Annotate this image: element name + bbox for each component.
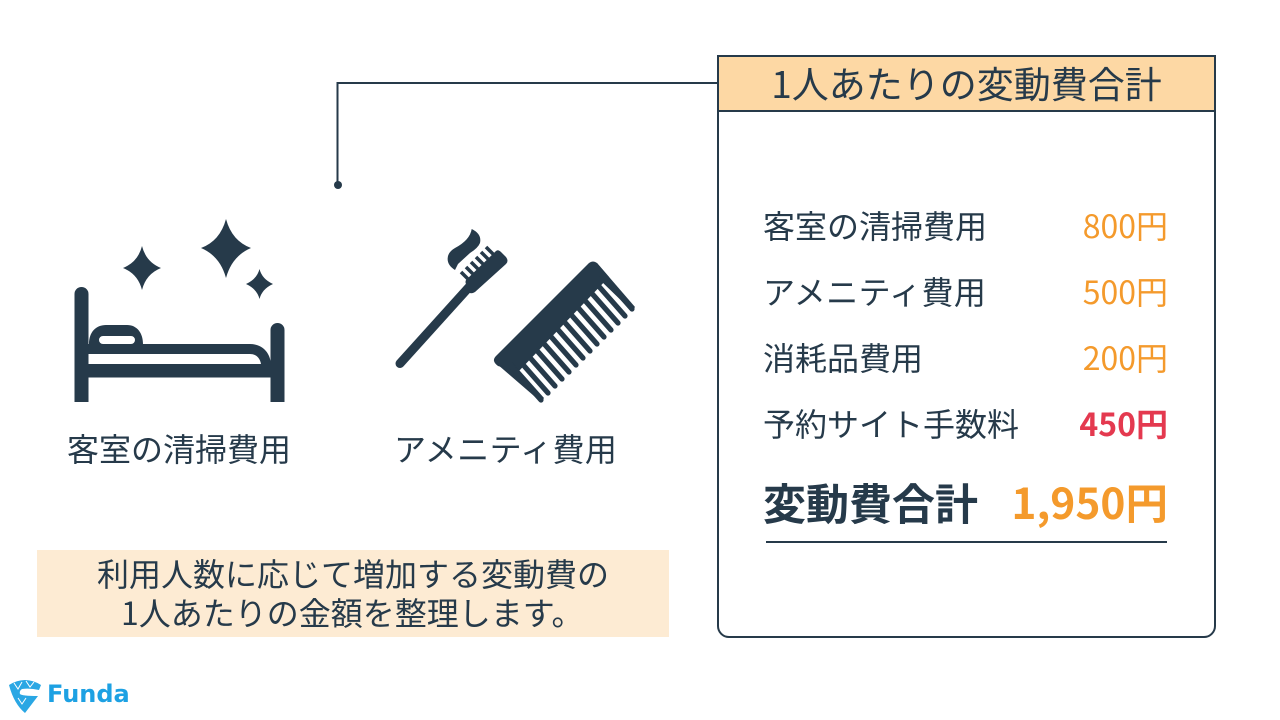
row: consumables: 消耗品費用 — [763, 334, 923, 380]
logo: Funda: Funda — [47, 680, 130, 708]
total label: 変動費合計 — [763, 471, 978, 533]
label: room cleaning cost: 客室の清掃費用 — [67, 425, 291, 471]
value: amenity: 500円 — [1083, 268, 1168, 314]
total underline — [766, 541, 1167, 543]
logo: Funda — [9, 680, 130, 713]
value: booking site fee: 450円 — [1079, 400, 1168, 446]
label: amenity cost: アメニティ費用 — [394, 425, 617, 471]
callout line 1: 利用人数に応じて増加する変動費の — [97, 550, 609, 596]
row: cleaning: 客室の清掃費用 — [763, 202, 987, 248]
row: amenity: アメニティ費用 — [763, 268, 986, 314]
row: booking site fee: 予約サイト手数料 — [763, 400, 1019, 446]
value: cleaning: 800円 — [1083, 202, 1168, 248]
panel heading: 1人あたりの変動費合計 — [771, 55, 1162, 109]
panel: variable cost total — [717, 55, 1216, 638]
total value: 1,950円 — [1011, 471, 1168, 532]
callout — [37, 550, 669, 637]
callout line 2: 1人あたりの金額を整理します。 — [121, 589, 584, 635]
value: consumables: 200円 — [1083, 334, 1168, 380]
